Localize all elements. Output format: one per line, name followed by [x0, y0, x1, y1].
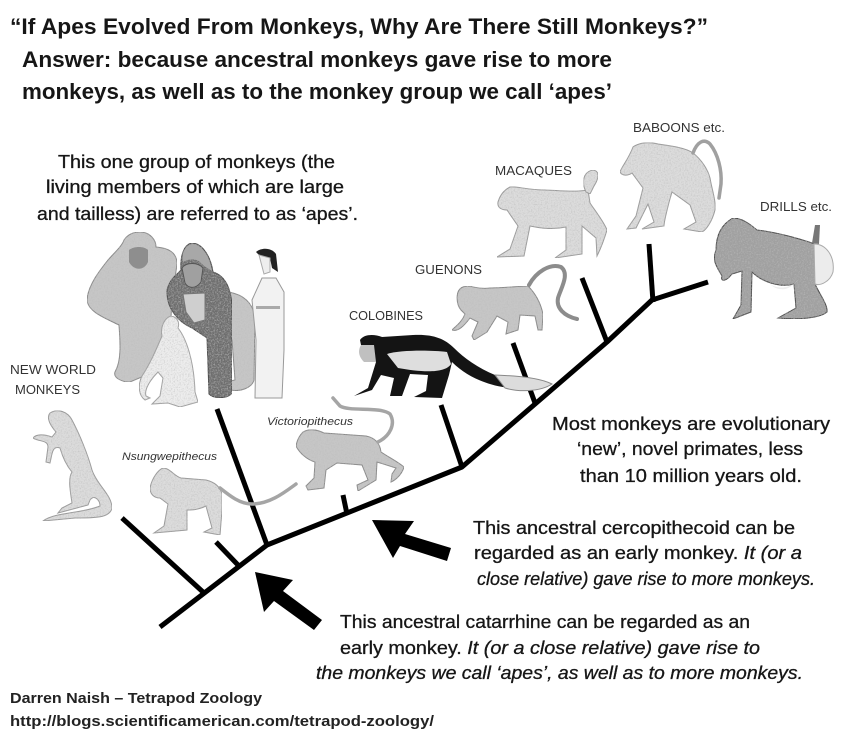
text block: most monkeys: Most monkeys are evolutionary [552, 414, 830, 434]
label: BABOONS etc.: BABOONS etc. [633, 120, 725, 135]
label: Victoriopithecus: Victoriopithecus [267, 416, 354, 428]
illustration: baboon [620, 141, 721, 232]
text block: ancestral cercopithecoid [473, 518, 815, 589]
text block: apes description: living members of which are large [46, 177, 344, 197]
text block: ancestral cercopithecoid: regarded as an early monkey. It (or a [474, 543, 802, 563]
gorilla face [182, 264, 203, 287]
footer credit: http://blogs.scientificamerican.com/tetrapod-zoology/ [10, 713, 435, 730]
giant ape [87, 232, 177, 382]
title: “If Apes Evolved From Monkeys, Why Are There Still Monkeys?” [10, 14, 708, 39]
text block: ancestral catarrhine: early monkey. It (or a close relative) gave rise to [340, 638, 760, 658]
label: COLOBINES: COLOBINES [349, 308, 423, 323]
text block: ancestral catarrhine: This ancestral catarrhine can be regarded as an [340, 612, 750, 632]
text block: most monkeys: ‘new’, novel primates, less [577, 439, 803, 459]
illustration: macaque [497, 170, 607, 258]
illustration: colobine monkey [354, 335, 552, 398]
illustration: guenon [452, 266, 577, 340]
icon: arrow to ancestral catarrhine [255, 572, 322, 630]
text block: ancestral catarrhine: the monkeys we call ‘apes’, as well as to more monkeys. [316, 663, 803, 683]
text block: ancestral cercopithecoid: This ancestral cercopithecoid can be [473, 518, 795, 538]
label: GUENONS: GUENONS [415, 262, 482, 277]
footer credit: Darren Naish – Tetrapod Zoology [10, 690, 263, 707]
text block: most monkeys [552, 414, 830, 486]
title: monkeys, as well as to the monkey group we call ‘apes’ [22, 79, 612, 104]
gorilla rear body [224, 292, 255, 391]
label: NEW WORLD MONKEYS: MONKEYS [15, 382, 80, 397]
gibbon [139, 316, 198, 407]
gorilla [167, 243, 232, 398]
title [10, 14, 708, 104]
illustration: new world monkey [33, 411, 112, 521]
illustration: drill [714, 218, 833, 319]
gorilla head crest [182, 244, 212, 271]
gorilla chest [183, 293, 205, 323]
icon: arrow to ancestral cercopithecoid [372, 520, 451, 561]
phylogenetic tree [122, 244, 708, 627]
label: NEW WORLD MONKEYS: NEW WORLD [10, 362, 96, 377]
giant ape face [129, 247, 148, 269]
label: DRILLS etc.: DRILLS etc. [760, 199, 832, 214]
label: Nsungwepithecus: Nsungwepithecus [122, 451, 218, 463]
label: NEW WORLD MONKEYS [10, 362, 96, 397]
title: Answer: because ancestral monkeys gave rise to more [22, 47, 612, 72]
text block: ancestral cercopithecoid: close relative) gave rise to more monkeys. [477, 569, 815, 589]
text block: most monkeys: than 10 million years old. [580, 466, 802, 486]
label: MACAQUES: MACAQUES [495, 163, 572, 178]
text block: apes description: and tailless) are referred to as ‘apes’. [37, 204, 358, 224]
text block: ancestral catarrhine [316, 612, 803, 683]
text block: apes description [37, 152, 358, 224]
text block: apes description: This one group of monkeys (the [58, 152, 335, 172]
footer credit [10, 690, 435, 730]
illustration: Nsungwepithecus [150, 468, 296, 535]
illustration: apes group with human [87, 232, 284, 407]
illustration: Victoriopithecus [296, 398, 404, 491]
human in kimono [252, 249, 284, 398]
